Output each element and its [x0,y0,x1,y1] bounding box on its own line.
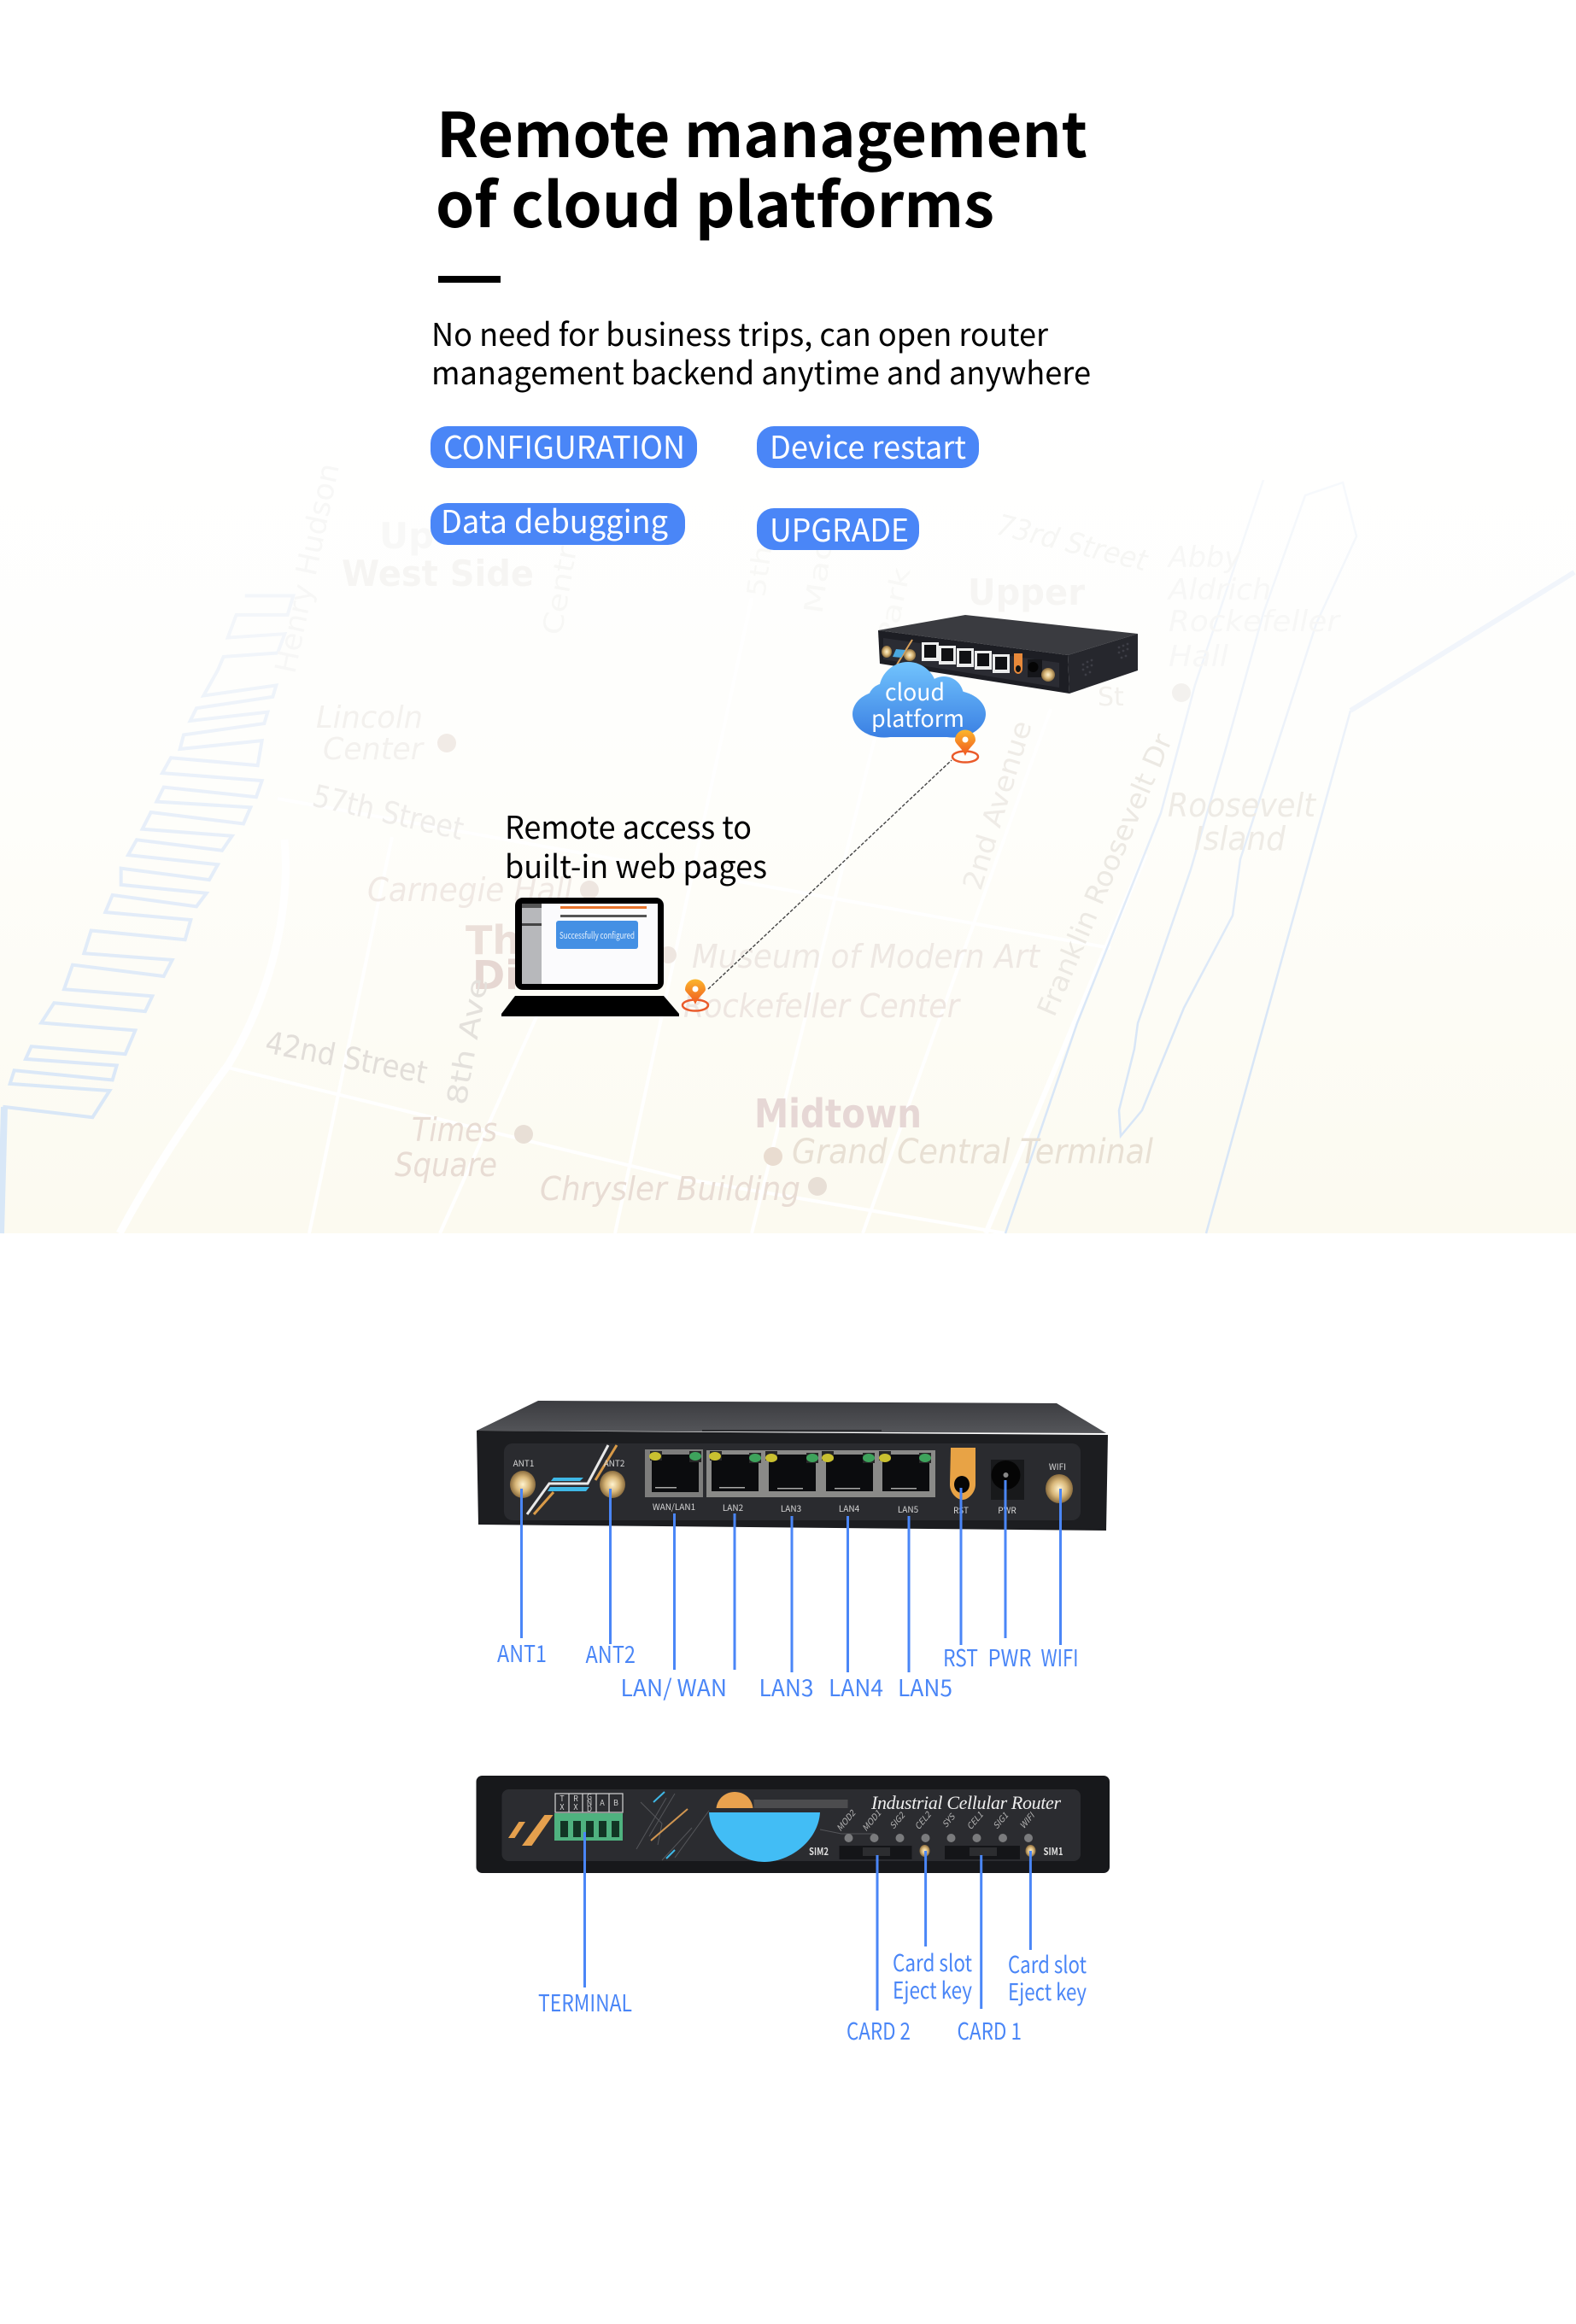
ports: RJ45 block [645,1449,935,1497]
SIM slots: SIM1 [1044,1844,1063,1859]
map: labels: Up [379,515,434,557]
power jack [991,1460,1024,1500]
silkscreen labels: WAN/LAN1 [653,1500,695,1513]
labels: rear panel: ANT1 [497,1636,547,1669]
map: labels: Midtown [754,1091,922,1137]
SIM slots: SIM2 [809,1844,829,1859]
LED indicators: WIFI [1016,1809,1037,1831]
map: labels: 8th Ave [440,975,495,1107]
map: labels: Carnegie Hall [367,871,572,909]
map: labels: Center [323,732,425,767]
silkscreen labels: ANT1 [513,1456,534,1469]
map: labels: 42nd Street [262,1026,431,1091]
silkscreen labels [513,1456,1066,1516]
decor: circuit traces [636,1792,875,1860]
LED indicators: MOD1 [858,1806,884,1834]
LED indicators: SYS [938,1810,958,1829]
caption: remote access: built-in web pages [505,841,767,887]
caption: remote access: Remote access to [505,802,752,848]
icon: cloud platform: platform [871,700,964,734]
product: router rear panel [477,1401,1108,1531]
decor: stripes [527,1445,617,1514]
terminal block: T [560,1793,565,1804]
map: labels: Hall [1169,640,1229,674]
terminal block: R [573,1793,578,1804]
LED indicators: MOD2 [833,1806,858,1834]
map: labels: Square [395,1146,497,1184]
subtitle text: No need for business trips, can open router [431,309,1049,355]
caption: remote access [505,802,767,887]
decor: orange slashes [508,1815,554,1846]
icon: cloud platform: cloud [885,674,945,707]
labels: rear panel: LAN3 [759,1670,813,1703]
map: river piers [3,595,293,1117]
map: east river lines [1005,480,1356,1233]
map: upper river band [1350,572,1574,711]
terminal block: A [600,1797,605,1808]
map: labels: Grand Central Terminal [792,1133,1153,1172]
SIM slots [809,1844,1063,1859]
map: labels: Mad [799,536,839,616]
map: labels: Abby [1167,541,1242,575]
map: labels: Roosevelt [1168,787,1317,824]
map: labels: Lincoln [316,700,423,735]
map: labels: 57th Street [309,779,467,847]
illustration: small router [878,615,1138,694]
terminal block: B [613,1797,618,1808]
labels: front panel: CARD 1 [957,2013,1022,2046]
decor: orange dome [716,1792,753,1808]
labels: front panel: Eject key [893,1972,972,2005]
tag: CONFIGURATION: CONFIGURATION [443,422,685,468]
leader lines: front panel [584,1832,1030,2011]
map: labels: Island [1194,820,1286,858]
silkscreen labels: RST [953,1503,969,1516]
silkscreen labels: WIFI [1049,1460,1066,1472]
map: labels: Centr [536,542,583,637]
title: of cloud platforms [436,155,994,245]
labels: rear panel: LAN5 [898,1670,952,1703]
map: labels: Rockefeller Center [683,987,961,1025]
tag: UPGRADE: UPGRADE [770,505,909,551]
labels: rear panel [497,1636,1078,1703]
antenna connectors [510,1471,1073,1503]
labels: rear panel: RST [943,1640,978,1673]
map: labels: 5th [741,544,778,599]
map: labels: Di [472,952,518,998]
LED indicators: SIG2 [886,1808,908,1831]
labels: rear panel: ANT2 [586,1636,636,1670]
silkscreen labels: LAN2 [723,1501,744,1513]
LED indicators: CEL2 [911,1807,934,1832]
labels: front panel: Card slot [1008,1946,1087,1980]
printed bar [753,1800,847,1808]
labels: front panel: Card slot [893,1945,972,1978]
subtitle text: management backend anytime and anywhere [431,348,1091,394]
map: labels: Franklin Roosevelt Dr [1030,729,1179,1021]
LED indicators: SIG1 [989,1809,1011,1831]
map: labels: Th [466,917,520,963]
labels: front panel: TERMINAL [538,1985,632,2018]
LED indicators [833,1806,1037,1842]
leader lines: rear panel [521,1480,1061,1672]
map: labels: Museum of Modern Art [692,938,1041,975]
silkscreen labels: LAN3 [781,1502,801,1514]
map: labels: Rockefeller [1169,605,1341,639]
labels: rear panel: WIFI [1040,1640,1078,1673]
map: labels: Chrysler Building [540,1170,800,1208]
icon: location pin laptop [683,979,708,1011]
terminal block [554,1791,623,1841]
icon: laptop with web page [501,898,679,1016]
icon: cloud platform [852,662,986,738]
map: labels: Upper [968,571,1085,613]
map: labels: 2nd Avenue [956,717,1039,893]
terminal block: X [573,1801,578,1812]
icon: location pin cloud [952,729,978,762]
terminal block: N [587,1797,592,1808]
reset tag [950,1448,975,1500]
decor: blue half ellipse [709,1812,820,1862]
map: labels [262,460,1341,1208]
product name: Industrial Cellular Router [870,1792,1061,1813]
silkscreen labels: LAN5 [898,1502,919,1515]
map: labels: Times [412,1111,497,1149]
silkscreen labels: PWR [998,1503,1016,1516]
labels: rear panel: LAN4 [829,1670,883,1703]
subtitle text [431,309,1091,394]
map: labels: 73rd Street [993,508,1152,579]
terminal block: G [587,1791,592,1802]
dashed connection line [708,760,952,989]
heading divider [438,276,501,283]
map: labels: West Side [342,553,534,594]
map: labels: St [1098,682,1124,712]
LED indicators: CEL1 [963,1808,986,1832]
tag: Device restart: Device restart [770,422,966,468]
labels: front panel: CARD 2 [847,2013,911,2046]
silkscreen labels: LAN4 [839,1502,860,1514]
product: router front panel [477,1776,1110,1873]
silkscreen labels: ANT2 [604,1456,625,1469]
map: labels: Henry Hudson [269,460,347,676]
terminal block: D [587,1803,592,1814]
terminal block: X [560,1801,565,1812]
title [436,85,1087,245]
map: labels: Park [872,565,917,647]
panel: faded city map background [0,410,1576,1233]
tag: Data debugging: Data debugging [441,496,668,542]
labels: rear panel: PWR [987,1640,1032,1673]
icon: laptop with web page: Successfully configured [560,928,635,942]
labels: rear panel: LAN/ WAN [620,1670,727,1703]
title: Remote management [436,85,1087,175]
labels: front panel [538,1945,1087,2046]
map: labels: Aldrich [1167,573,1271,607]
labels: front panel: Eject key [1008,1974,1087,2007]
